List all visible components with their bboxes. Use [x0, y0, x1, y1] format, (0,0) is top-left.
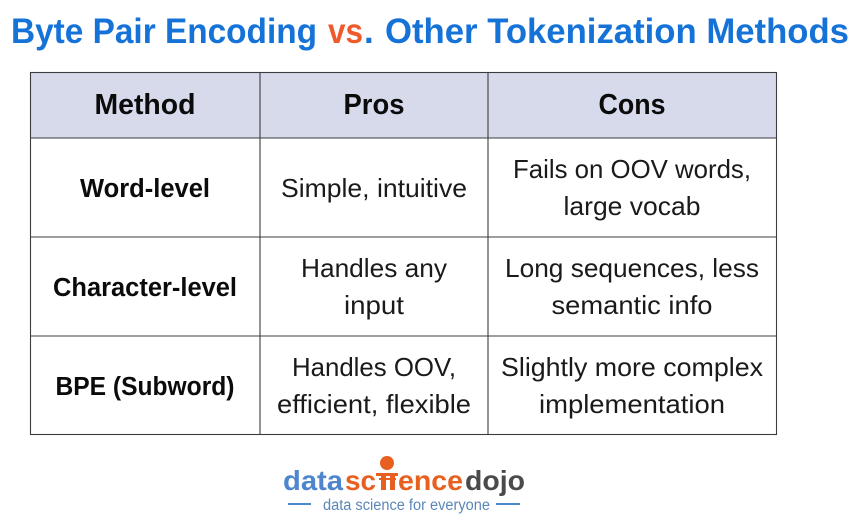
logo wordmark: sc: [345, 465, 376, 496]
table header row: Pros: [344, 89, 404, 121]
row: word-level: large vocab: [564, 191, 700, 221]
row: word-level: Word-level: [80, 175, 210, 203]
row: character-level: input: [344, 290, 405, 320]
logo wordmark: [283, 465, 525, 496]
comparison table: [30, 72, 777, 435]
row: character-level: semantic info: [552, 290, 712, 320]
title: vs: [328, 12, 363, 51]
logo wordmark: data: [283, 465, 343, 496]
logo wordmark: ence: [398, 465, 463, 496]
icon: dojo figure: [376, 456, 398, 490]
title: Byte Pair Encoding: [11, 12, 317, 51]
title: Other Tokenization Methods: [385, 12, 849, 51]
row: character-level: Character-level: [53, 274, 237, 302]
row: word-level: Simple, intuitive: [281, 173, 467, 203]
row: character-level: [53, 253, 759, 320]
table header row: [30, 72, 776, 138]
title: .: [364, 12, 374, 51]
row: BPE (subword): [56, 352, 763, 419]
table header row: Method: [94, 89, 196, 121]
row: BPE (subword): efficient, flexible: [277, 389, 471, 419]
row: BPE (subword): Slightly more complex: [501, 352, 763, 382]
row: word-level: [80, 154, 751, 221]
title: [11, 12, 849, 51]
row: BPE (subword): BPE (Subword): [56, 373, 234, 401]
logo: data science dojo: [283, 456, 525, 514]
row: word-level: Fails on OOV words,: [513, 154, 751, 184]
row: BPE (subword): implementation: [539, 389, 725, 419]
row: BPE (subword): Handles OOV,: [292, 352, 456, 382]
row: character-level: Long sequences, less: [505, 253, 759, 283]
logo wordmark: dojo: [465, 465, 525, 496]
row: character-level: Handles any: [301, 253, 447, 283]
table header row: Cons: [598, 89, 666, 121]
logo tagline: data science for everyone: [323, 497, 490, 514]
